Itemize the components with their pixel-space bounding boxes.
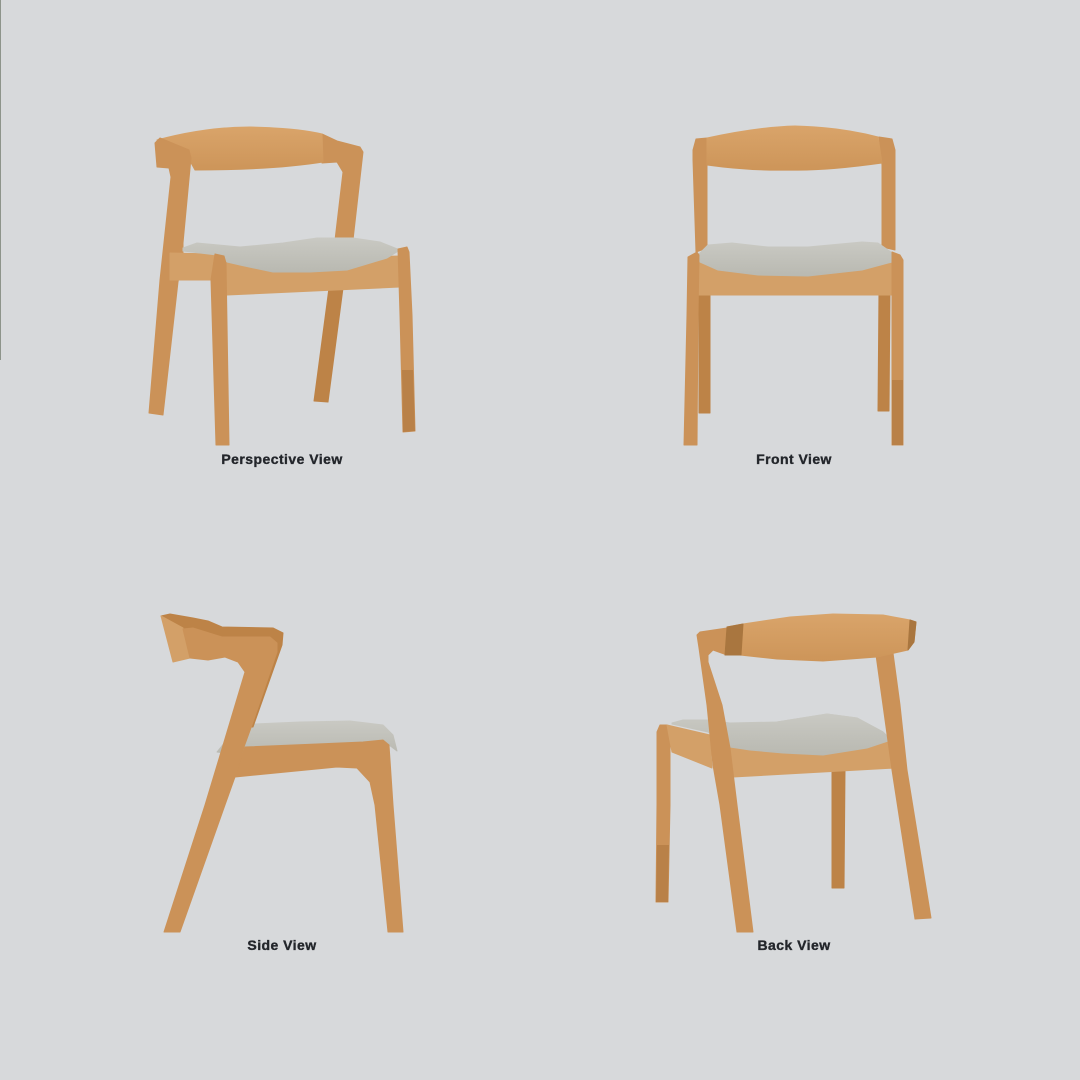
chair: side view [161,614,403,932]
far rear leg [314,288,343,402]
far backrest edge [161,614,283,727]
near post [697,628,753,932]
caption: perspective view: Perspective View [221,451,343,467]
front right leg [892,252,903,445]
right back post [879,137,895,250]
arm post and front leg [164,628,277,932]
rear legs [699,290,710,413]
right leg tip [402,370,415,432]
seat cushion front edge [730,714,891,755]
backrest [725,614,916,661]
left leg [656,725,670,902]
left leg tip [656,845,669,902]
seat rail [698,261,892,295]
right leg tip [892,380,903,445]
front left leg [684,252,699,445]
seat cushion [672,714,891,755]
backrest [707,126,882,170]
chair: perspective view [149,127,415,445]
chair: back view [656,614,931,932]
far arm post [322,134,363,240]
caption: side view: Side View [247,937,317,953]
backrest [157,127,323,170]
seat cushion [698,242,892,276]
left back post [693,138,707,252]
seat rail [226,256,400,295]
backrest end grain left [725,624,743,655]
caption: front view: Front View [756,451,832,467]
far post [876,653,931,919]
backrest inner face [161,616,190,662]
side rail [170,253,226,280]
caption: back view: Back View [757,937,831,953]
side rail [667,725,712,768]
near arm post and rear leg [149,138,191,415]
seat rail and rear leg [235,740,403,932]
seat rail [730,738,895,777]
front leg [211,254,229,445]
backrest end grain right [908,620,916,650]
rear far leg [832,770,845,888]
right front leg [398,247,415,432]
seat cushion [217,721,397,755]
chair: front view [684,126,903,445]
seat cushion [183,238,400,272]
